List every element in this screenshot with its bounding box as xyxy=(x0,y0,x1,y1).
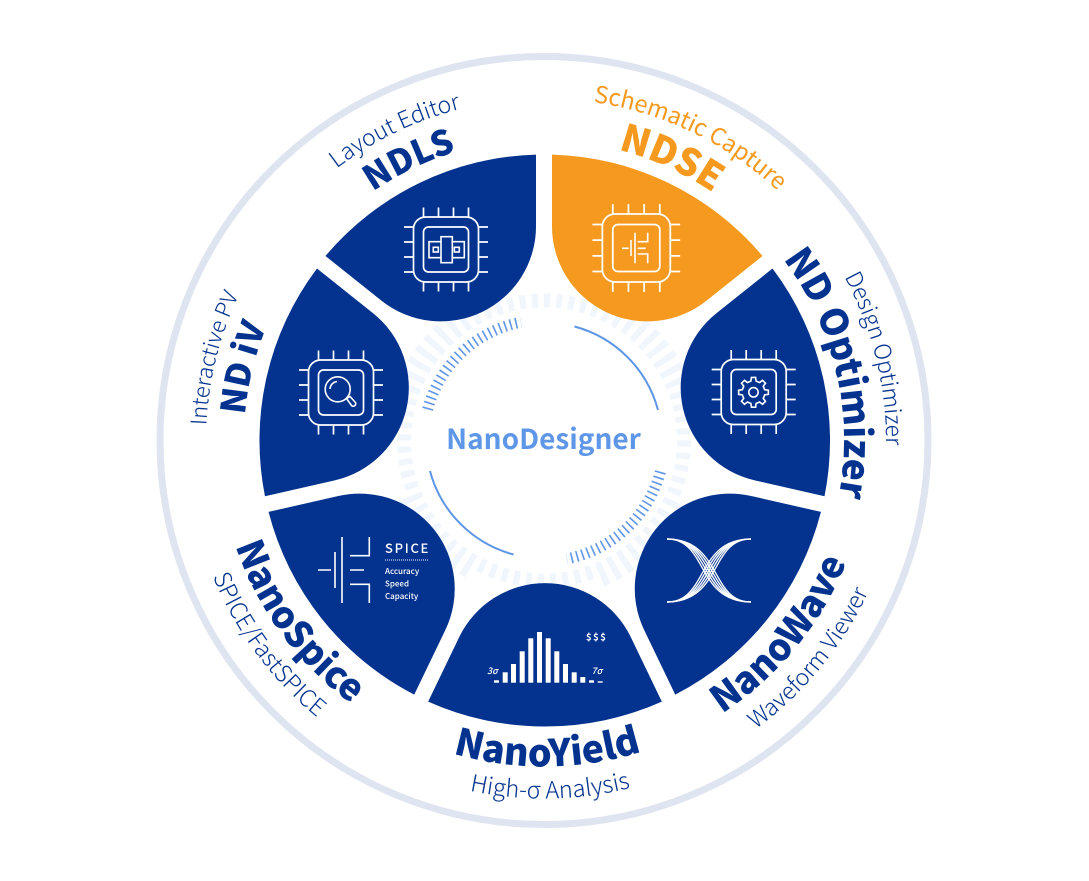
icon: NanoSpice capacitor with labels: SPICE xyxy=(385,538,430,557)
icon: NDLS chip xyxy=(404,208,488,292)
center tick ring xyxy=(392,288,696,592)
label: ND iV: Interactive PV xyxy=(190,288,236,423)
label: NDSE: NDSE xyxy=(621,123,726,192)
icon: NanoSpice capacitor with labels: Speed xyxy=(385,578,409,590)
icon: NanoSpice capacitor with labels: Accuracy xyxy=(385,566,420,577)
center title: NanoDesigner xyxy=(446,418,642,458)
icon: NanoSpice capacitor with labels xyxy=(318,537,430,603)
icon: ND Optimizer chip with gear xyxy=(712,350,796,434)
petal: NanoWave xyxy=(583,438,840,710)
label: NDLS: Layout Editor xyxy=(328,96,458,168)
petal: NanoSpice xyxy=(249,438,507,710)
label: NDSE: Schematic Capture xyxy=(594,86,784,190)
petal: ND Optimizer xyxy=(657,263,849,523)
label: NanoYield: High-σ Analysis xyxy=(472,773,630,802)
outer ring xyxy=(160,56,928,824)
icon: NanoYield histogram: $$$ xyxy=(586,630,607,644)
icon: NanoYield histogram: 3σ xyxy=(487,664,499,677)
label: ND iV xyxy=(190,288,264,423)
label: ND iV: ND iV xyxy=(220,318,264,412)
label: NDLS: NDLS xyxy=(362,129,453,190)
petal: NDSE xyxy=(501,132,773,363)
petal: ND iV xyxy=(241,263,432,523)
inner solid arc: bottom left xyxy=(430,471,514,554)
petal: NanoYield xyxy=(428,583,662,727)
icon: NanoYield histogram xyxy=(487,630,607,683)
inner hatched arc: bottom right xyxy=(567,472,660,559)
petal: NDLS xyxy=(315,132,587,363)
label: ND Optimizer: ND Optimizer xyxy=(785,246,875,500)
icon: ND iV chip with magnifier xyxy=(299,350,383,434)
inner hatched arc: top left xyxy=(428,322,521,409)
icon: NanoYield histogram: 7σ xyxy=(592,664,604,677)
label: NanoSpice: NanoSpice xyxy=(236,539,360,702)
label: ND Optimizer: Design Optimizer xyxy=(846,271,902,446)
label: NDLS xyxy=(328,96,458,190)
icon: NDSE chip xyxy=(592,204,680,292)
label: NanoWave: Waveform Viewer xyxy=(746,586,866,726)
label: NanoWave: NanoWave xyxy=(708,558,844,712)
inner solid arc: top right xyxy=(574,326,658,410)
label: NanoYield: NanoYield xyxy=(456,724,640,767)
label: NanoSpice: SPICE/FastSPICE xyxy=(214,572,327,717)
icon: NanoSpice capacitor with labels: Capacity xyxy=(385,591,419,602)
icon: NanoWave crossing waveforms xyxy=(667,539,751,602)
label: NanoYield xyxy=(456,724,640,802)
